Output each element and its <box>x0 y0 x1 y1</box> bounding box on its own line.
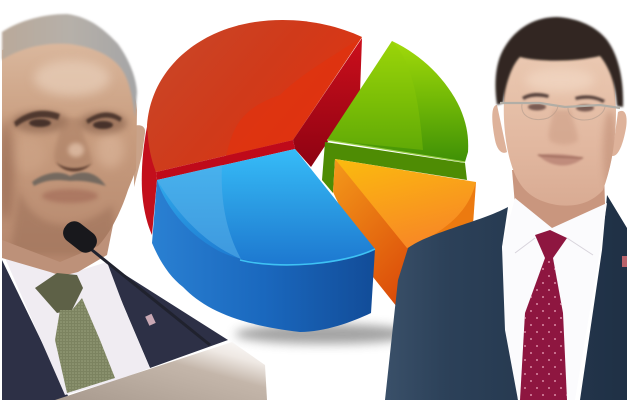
nose <box>549 110 578 145</box>
eyes <box>29 119 113 129</box>
face <box>2 42 137 262</box>
jacket <box>2 260 228 400</box>
jacket <box>385 195 627 400</box>
lapel pin <box>622 256 627 267</box>
eye sockets <box>12 111 68 133</box>
moustache <box>32 172 106 186</box>
pie slice: orange <box>333 159 476 307</box>
pie slice: green <box>322 41 468 193</box>
face side shadow <box>0 120 14 220</box>
neck <box>2 215 115 276</box>
lapel pin <box>145 314 156 326</box>
nose <box>54 118 92 172</box>
eyes <box>528 104 594 112</box>
hair <box>495 17 623 107</box>
portrait: right man <box>385 17 627 400</box>
forehead highlight <box>34 60 110 96</box>
glasses <box>500 103 620 120</box>
mouth <box>538 154 583 166</box>
portrait: left man <box>0 14 267 400</box>
microphone <box>59 217 210 345</box>
neck <box>512 170 605 230</box>
shirt <box>502 198 607 400</box>
eyebrows <box>522 93 605 103</box>
tie <box>520 230 567 400</box>
lower jaw shadow <box>12 197 116 254</box>
eyebrows <box>14 111 122 127</box>
face <box>504 50 616 206</box>
hair <box>2 14 137 118</box>
ear <box>134 125 145 187</box>
shirt <box>5 258 150 395</box>
pie shadow <box>235 324 415 344</box>
cheek highlights <box>96 132 124 168</box>
face shading <box>603 110 617 190</box>
tie <box>35 273 115 393</box>
ears <box>492 105 627 156</box>
pie slice: blue <box>152 149 375 332</box>
3D pie chart <box>142 20 476 332</box>
collar shadow <box>515 238 593 255</box>
pie slice: red <box>142 20 362 235</box>
podium <box>55 342 267 400</box>
lip shading <box>42 189 98 203</box>
